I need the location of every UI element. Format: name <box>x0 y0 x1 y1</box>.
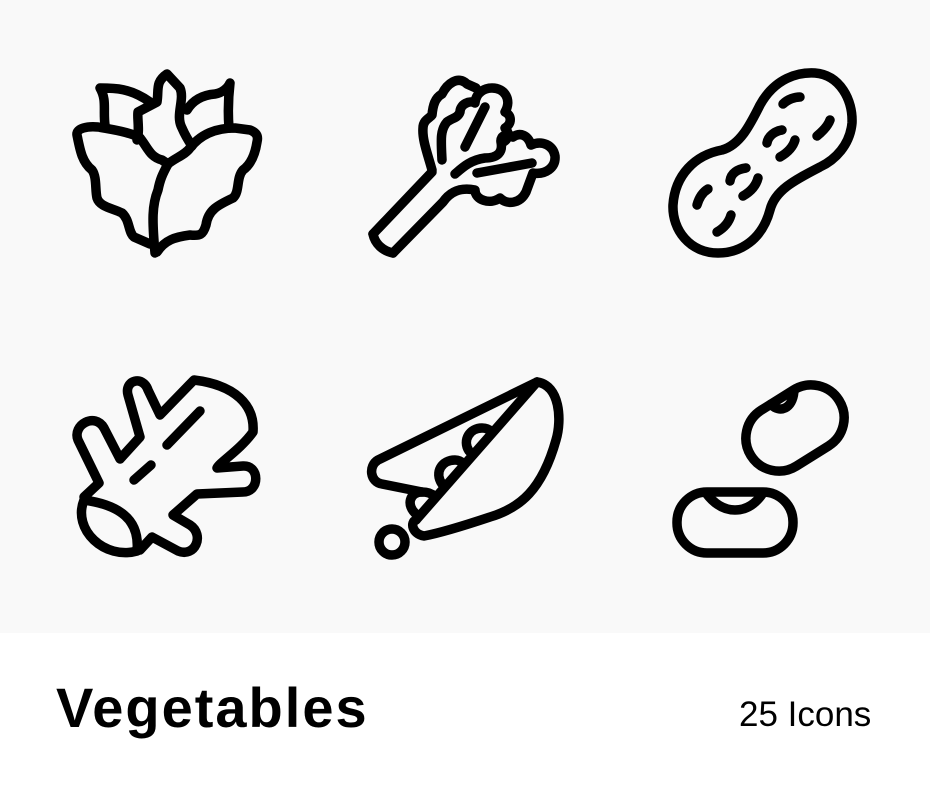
icon: lettuce <box>77 74 257 253</box>
icon: pea pod <box>372 382 559 555</box>
icon: celery <box>373 80 555 253</box>
title: Vegetables <box>56 676 369 739</box>
icon count: 25 Icons <box>739 695 871 734</box>
icon: peanut <box>673 73 852 253</box>
icon: ginger <box>77 380 256 553</box>
icon: beans <box>677 372 857 553</box>
